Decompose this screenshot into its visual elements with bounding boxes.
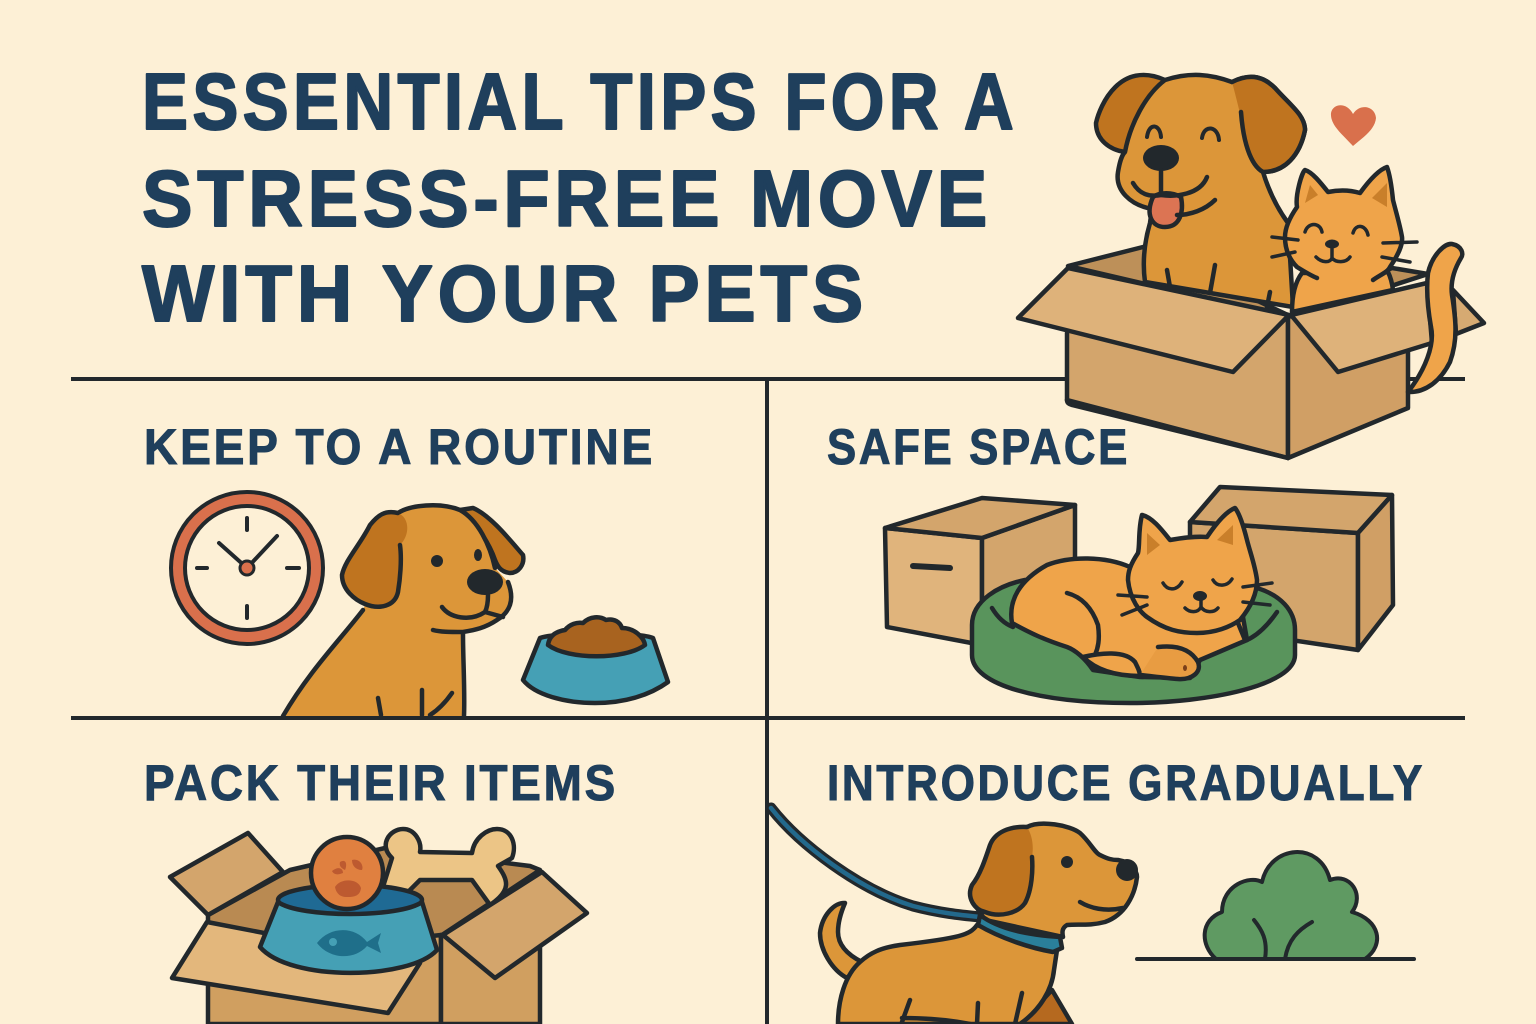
leash — [771, 808, 980, 917]
head — [975, 824, 1137, 937]
bed — [972, 580, 1295, 703]
icon: green bush — [1137, 852, 1414, 959]
heart — [1331, 105, 1376, 146]
bone — [382, 829, 514, 905]
tail — [820, 903, 862, 978]
right flap — [443, 872, 587, 978]
icon: food bowl — [523, 617, 668, 703]
illustration: dog and cat in moving box — [1018, 75, 1484, 458]
right box — [1190, 522, 1358, 650]
heading: safe space: SAFE SPACE — [827, 419, 1130, 475]
heading: pack their items: PACK THEIR ITEMS — [144, 755, 618, 811]
box faces — [1067, 333, 1288, 458]
ball — [311, 837, 383, 909]
cat tail — [1408, 244, 1462, 392]
cat — [1011, 558, 1247, 678]
title: ESSENTIAL TIPS FOR A — [142, 57, 1018, 146]
far leg — [1020, 990, 1072, 1024]
flaps — [1018, 268, 1289, 372]
illustration: open box with toy, bone and bowl — [170, 829, 587, 1024]
illustration: cat resting between boxes — [885, 487, 1393, 703]
title: WITH YOUR PETS — [142, 249, 868, 338]
heading: keep to a routine: KEEP TO A ROUTINE — [144, 419, 655, 475]
back left flap — [170, 833, 283, 915]
dog — [1096, 75, 1305, 307]
illustration: sitting dog — [283, 505, 523, 716]
heading: introduce gradually: INTRODUCE GRADUALLY — [827, 755, 1425, 811]
box faces — [208, 935, 441, 1024]
box interior — [1068, 247, 1428, 318]
title: STRESS-FREE MOVE — [142, 154, 992, 243]
box interior — [208, 848, 540, 950]
left box — [885, 528, 982, 645]
title — [142, 57, 1018, 338]
bowl interior — [278, 885, 422, 915]
body — [838, 925, 1057, 1024]
left flap — [172, 922, 420, 1013]
illustration: dog on leash — [771, 808, 1138, 1024]
ear — [970, 827, 1033, 915]
collar — [978, 915, 1062, 952]
bowl body — [260, 902, 437, 973]
icon: wall clock — [171, 492, 323, 644]
cat — [1272, 167, 1417, 312]
